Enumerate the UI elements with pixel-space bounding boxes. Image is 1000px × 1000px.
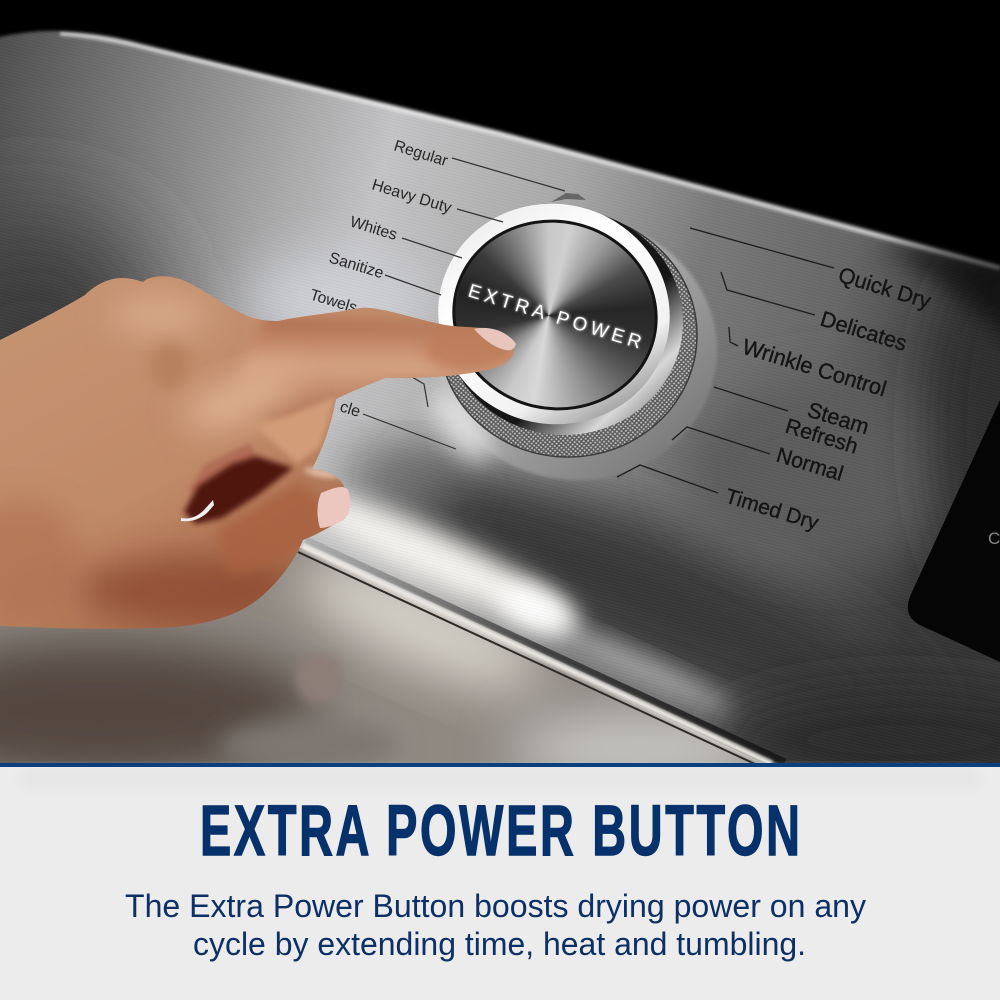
knob base halo [422,220,717,480]
chrome ridge [298,540,785,764]
chrome collar [445,209,683,435]
index finger shading [243,314,514,418]
knob label: Extra Power: EXTRA POWER [466,281,644,353]
hand pointing at button [0,276,516,629]
inner palm tone [188,443,256,492]
thumb body shade [216,480,332,570]
hand reflection [296,652,344,704]
thumb nail [317,487,350,528]
description text: cycle by extending time, heat and tumbling. [193,926,806,962]
right cycle labels [723,262,934,535]
label: Timed Dry: Timed Dry [723,485,822,535]
label: Delicates: Delicates [818,306,910,356]
finger gap shadow [184,456,293,524]
label: Sanitize: Sanitize [327,250,386,282]
chrome ring [438,204,670,424]
label: cycle fragment: cle [338,399,362,421]
top right vignette [880,245,1000,350]
label: Refresh: Refresh [783,414,861,459]
knuckle crease shadow [154,341,186,386]
label: Normal: Normal [774,443,846,486]
ridge glow [318,484,590,644]
hand base colour [0,276,514,629]
brushed steel panel [0,0,1000,800]
knuckle highlights [110,297,210,333]
label: Towels: Towels [308,287,359,317]
label: Wrinkle Control: Wrinkle Control [740,334,890,401]
left leader lines [363,158,565,449]
middle finger [257,397,336,463]
fingertip warmth [425,328,515,372]
thumb top highlight [304,466,340,480]
ring glint [181,500,214,521]
knob text and hand [0,276,1000,1000]
bottom text band [0,763,1000,1000]
index fingernail [474,328,516,350]
lower reflective surface [0,548,763,763]
right leader lines [617,228,834,493]
label: Whites: Whites [348,214,399,244]
description text: The Extra Power Button boosts drying power on any [125,888,866,924]
label: Heavy Duty: Heavy Duty [370,177,453,217]
scene: dryer control panel [0,28,1000,763]
knob label: Extra Power: EXTRA POWER [466,281,644,353]
heading: EXTRA POWER BUTTON [200,791,800,870]
black background above panel [0,0,1000,264]
description text [125,888,866,962]
label: Steam: Steam [805,397,872,439]
panel top highlight edge [60,33,1000,268]
knob metallic face [434,201,676,429]
knurled knob side [439,213,697,457]
label: Quick Dry: Quick Dry [836,262,934,314]
hand lower shadow [80,555,300,625]
left cycle labels [308,138,453,421]
label: Regular: Regular [392,138,450,170]
control display panel [908,400,1000,662]
display glyph: C [988,529,1000,548]
pointer mark [551,193,586,202]
